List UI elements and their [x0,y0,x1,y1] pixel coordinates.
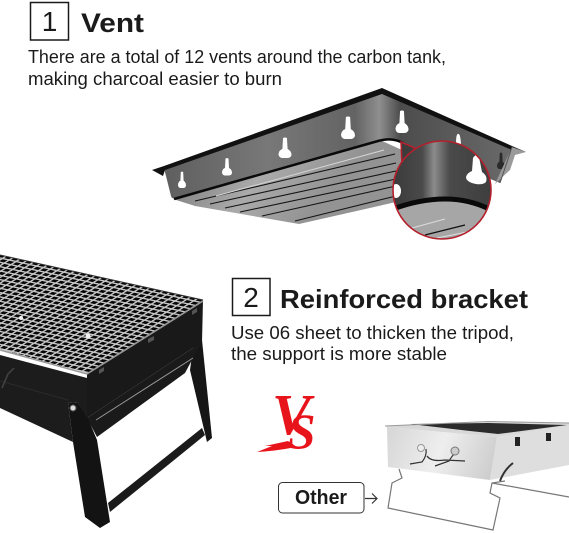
other label: Other [295,487,347,509]
bracket description: Use 06 sheet to thicken the tripod, [231,323,514,343]
vent description: making charcoal easier to burn [28,69,282,89]
tray interior [410,423,567,434]
vs mark: S [288,403,316,459]
bracket description: the support is more stable [231,344,447,364]
side slots [99,308,197,374]
handle wires [410,449,465,466]
handle latch [2,368,14,388]
front panel [0,355,87,442]
number box 1: 1 [42,6,57,37]
silver comparison grill [385,422,569,530]
black folding grill [0,255,212,528]
bracket title: Reinforced bracket [280,284,528,314]
latches [515,433,551,446]
right panel [490,425,569,480]
vent holes [178,110,461,188]
tank side band [164,93,512,198]
plate ribs [195,154,396,221]
grate top [0,255,203,373]
number box 2 [232,278,270,316]
magnifier callout [391,141,491,240]
wire legs [388,469,569,530]
vs mark [257,382,316,459]
vent description: There are a total of 12 vents around the carbon tank, [28,47,446,67]
rear leg [190,340,212,442]
pivot rivet [70,405,76,411]
leg crossbar [108,428,205,512]
tray rim [385,422,569,437]
side panel [87,300,203,418]
grate highlights [19,316,90,338]
vent title: Vent [81,8,144,38]
other label [278,482,364,513]
right flange edge [495,147,526,184]
left panel [387,427,497,480]
heading: vent [30,2,144,40]
arrow to other grill [365,494,377,504]
number box 2: 2 [243,282,259,313]
carbon tank illustration [152,88,526,240]
vs mark: V [272,382,311,447]
front leg [68,402,110,528]
vent description [28,47,446,89]
inner rail [87,342,202,437]
tank flange [152,88,526,176]
bracket description [231,323,514,364]
tank bottom plate [173,140,405,224]
heading: reinforced bracket [232,278,528,316]
